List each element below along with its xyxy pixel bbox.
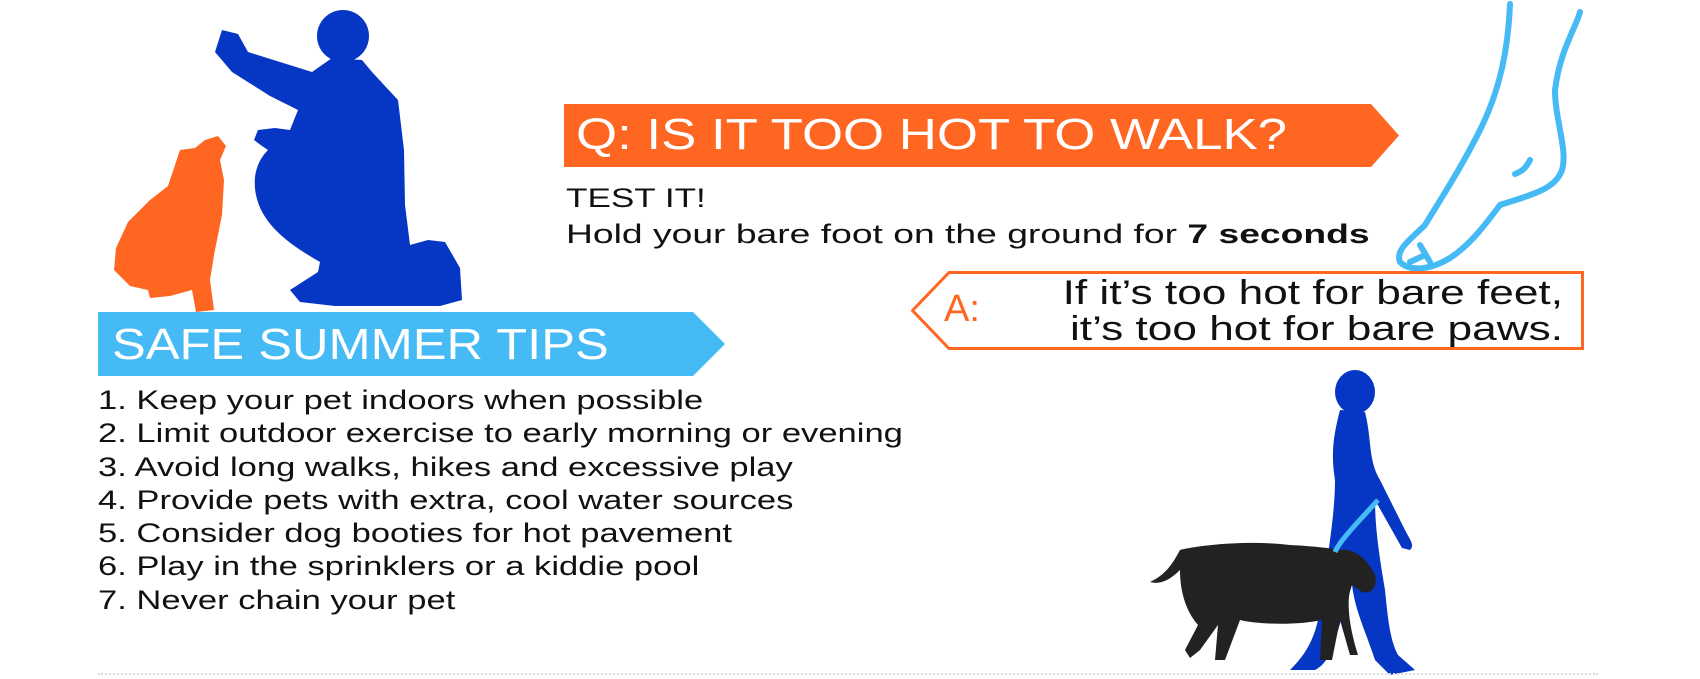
banner: question: [564, 104, 1399, 167]
list: tips: 2. Limit outdoor exercise to early morning or evening: [98, 418, 903, 448]
callout: answer box: If it’s too hot for bare feet,: [1063, 274, 1563, 312]
list: tips: 5. Consider dog booties for hot pavement: [98, 518, 732, 548]
icon: kneeling man silhouette: [215, 10, 462, 306]
banner: question: Q: IS IT TOO HOT TO WALK?: [576, 110, 1287, 159]
icon: sitting orange dog: [114, 136, 226, 312]
icon: leash: [1335, 500, 1378, 552]
callout: answer box: [911, 271, 1584, 350]
illustration: woman walking dog: [1150, 370, 1415, 675]
list: tips: 6. Play in the sprinklers or a kiddie pool: [98, 551, 699, 581]
text: test it: TEST IT!: [566, 183, 706, 213]
list: tips: 1. Keep your pet indoors when possible: [98, 385, 703, 415]
text: hold foot instruction: Hold your bare foot on the ground for 7 seconds: [566, 219, 1370, 249]
list: tips: 7. Never chain your pet: [98, 585, 455, 615]
icon: woman silhouette: [1290, 370, 1415, 675]
icon: foot outline: [1396, 1, 1583, 271]
list: tips: 4. Provide pets with extra, cool water sources: [98, 485, 793, 515]
icon: black dog silhouette: [1150, 543, 1376, 660]
illustration: man and orange dog: [114, 10, 462, 312]
list: tips: 3. Avoid long walks, hikes and excessive play: [98, 452, 793, 482]
decorative dotted line: [98, 673, 1598, 675]
callout: answer box: A:: [944, 288, 980, 330]
banner: safe summer tips: SAFE SUMMER TIPS: [112, 320, 609, 369]
list: tips: [98, 385, 903, 615]
callout: answer box: it’s too hot for bare paws.: [1070, 310, 1563, 348]
banner: safe summer tips: [98, 312, 725, 376]
